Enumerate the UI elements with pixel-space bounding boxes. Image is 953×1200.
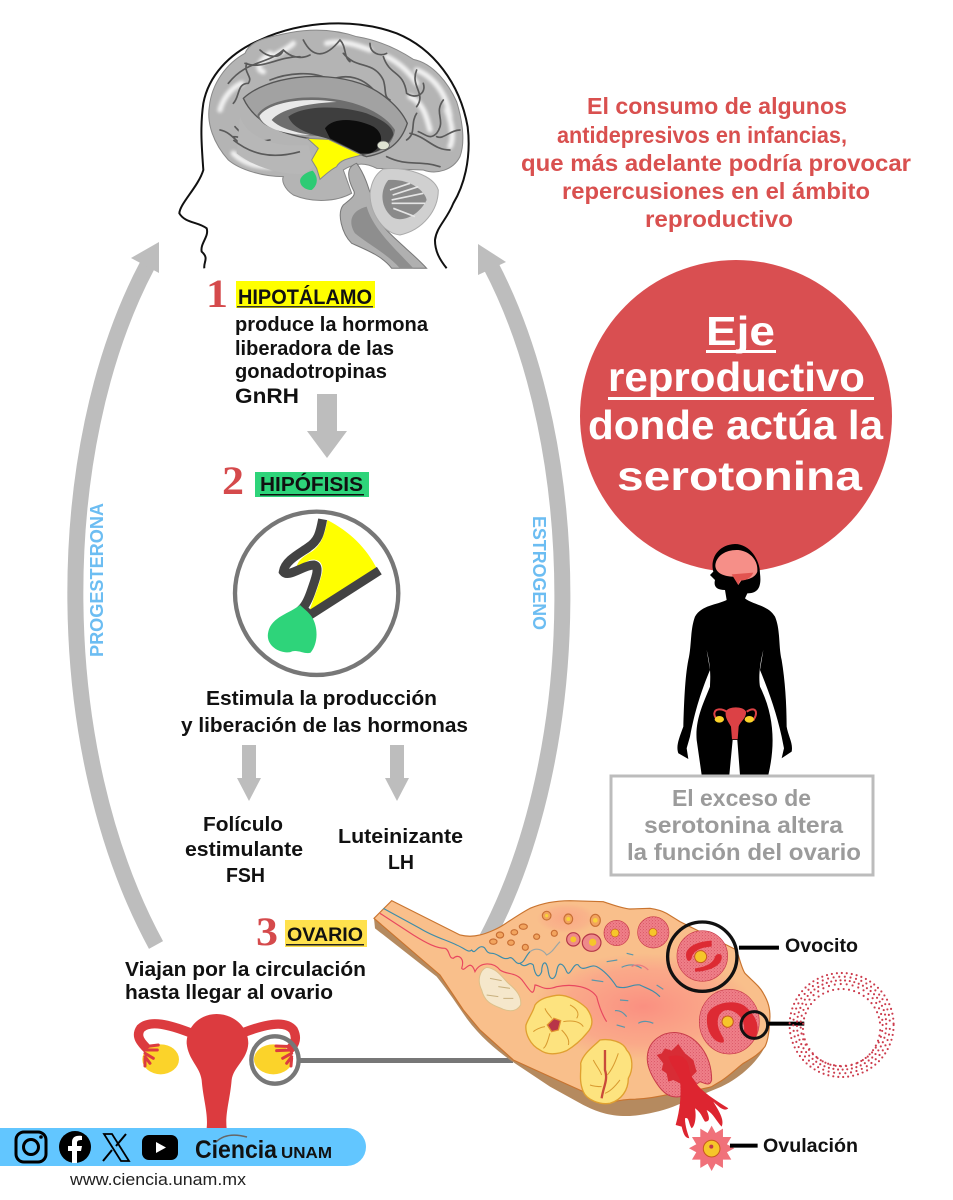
grey text box: serotonina altera (644, 812, 843, 838)
ruptured follicle (647, 1033, 728, 1138)
pituitary shape (268, 605, 317, 653)
label: estrogeno: ESTROGENO (529, 516, 550, 630)
stimulation text: y liberación de las hormonas (181, 714, 468, 737)
intro text: repercusiones en el ámbito (562, 178, 870, 204)
veins (380, 908, 663, 1027)
intro text: El consumo de algunos (587, 93, 847, 119)
title text: donde actúa la (588, 402, 884, 448)
logo: ciencia unam: UNAM (281, 1145, 332, 1162)
lh label (338, 825, 463, 874)
title text (588, 308, 884, 499)
icon: x (103, 1134, 129, 1161)
label: ovulacion: Ovulación (763, 1136, 858, 1157)
grey text box: El exceso de (672, 785, 811, 811)
brain (209, 30, 463, 268)
grey text box: la función del ovario (627, 839, 861, 865)
description (235, 313, 429, 408)
corpus luteum large (526, 995, 592, 1054)
lh label: LH (388, 851, 414, 874)
fsh label: FSH (226, 864, 265, 887)
description: liberadora de las (235, 337, 394, 360)
brainstem (340, 163, 427, 268)
detail magnifier (741, 1012, 768, 1038)
connector line (298, 1058, 513, 1063)
fsh label: estimulante (185, 838, 303, 861)
growing follicles (570, 917, 669, 948)
icon: youtube (142, 1135, 178, 1160)
detail leader (768, 1022, 804, 1026)
intro text: antidepresivos en infancias, (557, 122, 847, 148)
uterus illustration (139, 1014, 299, 1128)
website url: www.ciencia.unam.mx (69, 1170, 247, 1189)
label: progesterona: PROGESTERONA (86, 503, 107, 657)
ovocito magnifier (668, 922, 737, 991)
label: ovocito: Ovocito (785, 936, 858, 957)
icon: instagram (16, 1132, 46, 1162)
title circle (580, 260, 892, 572)
title text: Eje (706, 308, 775, 354)
arrow: progesterona (75, 242, 159, 945)
gyri creases (220, 40, 460, 167)
fsh label: Folículo (203, 813, 283, 836)
description: produce la hormona (235, 313, 429, 336)
tube fimbriae (668, 1055, 728, 1138)
step 2: hipofisis (222, 458, 369, 503)
fsh label (185, 813, 303, 887)
hipofisis detail circle (235, 512, 398, 675)
icon: facebook (59, 1131, 91, 1163)
head outline (179, 23, 469, 268)
arrow: to lh (385, 745, 409, 801)
logo: ciencia unam: Ciencia (195, 1136, 278, 1164)
ovary illustration (374, 901, 894, 1171)
grey text box (611, 776, 873, 875)
gyri highlights (220, 42, 452, 167)
hypothalamus shape (297, 520, 377, 613)
arrow: estrogeno (478, 244, 562, 940)
woman silhouette (677, 544, 792, 775)
mature follicle (699, 989, 759, 1054)
hypothalamus (307, 138, 362, 179)
stimulation text: Estimula la producción (206, 687, 437, 710)
highlight label: HIPÓFISIS (260, 472, 363, 496)
intro text: reproductivo (645, 206, 793, 232)
circulation text (125, 958, 366, 1004)
title text: serotonina (617, 453, 863, 499)
highlight label: OVARIO (287, 924, 363, 946)
cerebellum (370, 169, 438, 235)
arrow: gnrh to hipofisis (307, 394, 347, 458)
number 2: 2 (222, 458, 244, 503)
magnifier circle (251, 1036, 299, 1084)
ovary body (374, 901, 770, 1116)
number 1: 1 (206, 271, 228, 316)
title text: reproductivo (608, 354, 865, 400)
logo: ciencia unam (195, 1135, 332, 1164)
ovulated egg (689, 1126, 734, 1171)
ovocito leader (739, 946, 779, 950)
description: gonadotropinas (235, 360, 387, 383)
circulation text: Viajan por la circulación (125, 958, 366, 981)
number 3: 3 (256, 909, 278, 954)
description: GnRH (235, 385, 299, 408)
arrow: to fsh (237, 745, 261, 801)
intro text (521, 93, 911, 232)
step 3: ovario (256, 909, 367, 954)
white body (479, 967, 521, 1011)
highlight label: HIPOTÁLAMO (238, 286, 372, 309)
ovocito follicle (677, 931, 728, 981)
woman brain (715, 550, 757, 585)
corpus luteum small (580, 1040, 632, 1104)
stippled ring detail (790, 973, 894, 1077)
footer bar (0, 1128, 366, 1166)
small follicles (490, 911, 601, 951)
pituitary (300, 171, 317, 190)
woman uterus (714, 707, 756, 739)
head and brain illustration (179, 23, 469, 268)
circulation text: hasta llegar al ovario (125, 981, 333, 1004)
ovulacion leader (730, 1144, 758, 1148)
lh label: Luteinizante (338, 825, 463, 848)
intro text: que más adelante podría provocar (521, 150, 911, 176)
step 1: hipotalamo (206, 271, 429, 408)
stimulation text (181, 687, 468, 737)
